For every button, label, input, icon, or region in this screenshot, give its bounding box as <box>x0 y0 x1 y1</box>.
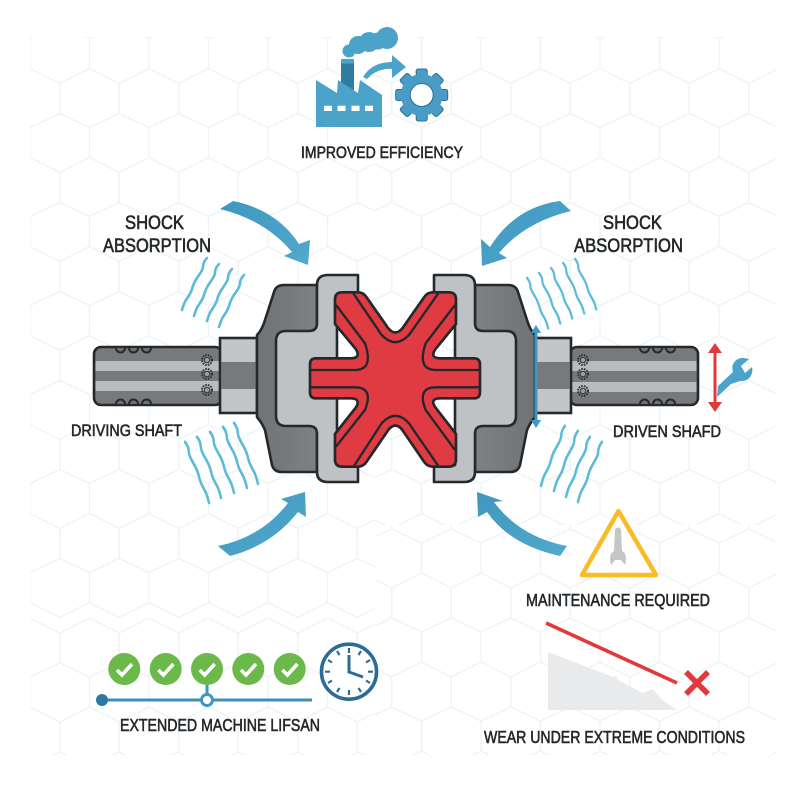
label: shock absorption left: SHOCK <box>125 213 184 234</box>
heading: improved efficiency: IMPROVED EFFICIENCY <box>301 144 463 162</box>
collar <box>220 338 257 413</box>
shaft body <box>570 347 698 405</box>
chart: declining red line <box>546 623 677 683</box>
double arrow: red radial <box>708 343 722 412</box>
coupling: left hub <box>257 275 358 482</box>
label: driving shaft: DRIVING SHAFT <box>71 421 182 440</box>
shaft bands <box>572 361 696 392</box>
panel: wear under extreme conditions <box>484 623 745 747</box>
icon: gear <box>396 69 448 121</box>
timeline <box>96 685 312 706</box>
green check badges <box>108 653 306 685</box>
vibration waves: upper left <box>182 258 244 327</box>
arrow: top right <box>481 201 571 266</box>
icon: wrench <box>717 358 752 397</box>
label: shock absorption right <box>574 213 683 257</box>
icon: wrench in triangle <box>610 528 626 565</box>
label: shock absorption left <box>103 213 211 257</box>
spline bumps <box>640 348 675 404</box>
label: maintenance required: MAINTENANCE REQUIRED <box>526 590 710 610</box>
collar <box>535 338 571 413</box>
driven shaft <box>535 338 698 413</box>
spline bumps <box>116 348 151 404</box>
shaft body <box>94 347 222 405</box>
icon: clock <box>322 644 376 699</box>
icon: factory <box>316 80 382 127</box>
icon: red x <box>686 672 708 694</box>
spider arm lines <box>311 293 480 466</box>
arrow: bottom left <box>218 492 306 556</box>
vibration waves: upper right <box>527 259 596 328</box>
small gears <box>202 355 212 395</box>
panel: extended machine lifespan <box>96 644 376 735</box>
small gears <box>578 355 588 396</box>
label: wear under extreme conditions: WEAR UNDER EXTREME CONDITIONS <box>484 727 745 747</box>
label: shock absorption right: ABSORPTION <box>574 236 683 257</box>
label: driven shaft: DRIVEN SHAFD <box>613 422 721 441</box>
icon: arrow from factory to gear <box>363 55 406 79</box>
icon: warning triangle <box>582 511 656 575</box>
shaft bands <box>96 361 220 391</box>
driving shaft <box>94 338 257 413</box>
icon: smoke cloud <box>342 27 398 58</box>
double arrow: blue axial <box>531 325 541 428</box>
panel: improved efficiency <box>301 27 463 162</box>
vibration waves: lower left <box>185 423 258 503</box>
arrow: top left <box>220 201 310 265</box>
arrow: bottom right <box>477 492 567 556</box>
coupling: right hub <box>434 275 535 482</box>
label: shock absorption left: ABSORPTION <box>103 236 211 257</box>
vibration waves: lower right <box>541 426 602 502</box>
red elastomer spider <box>310 292 480 467</box>
label: shock absorption right: SHOCK <box>603 213 662 234</box>
panel: maintenance required <box>526 511 710 610</box>
label: extended machine lifsan: EXTENDED MACHINE LIFSAN <box>120 715 320 735</box>
chart: wear area <box>548 652 677 710</box>
icon: chimney <box>341 59 354 90</box>
spider body <box>310 292 480 467</box>
